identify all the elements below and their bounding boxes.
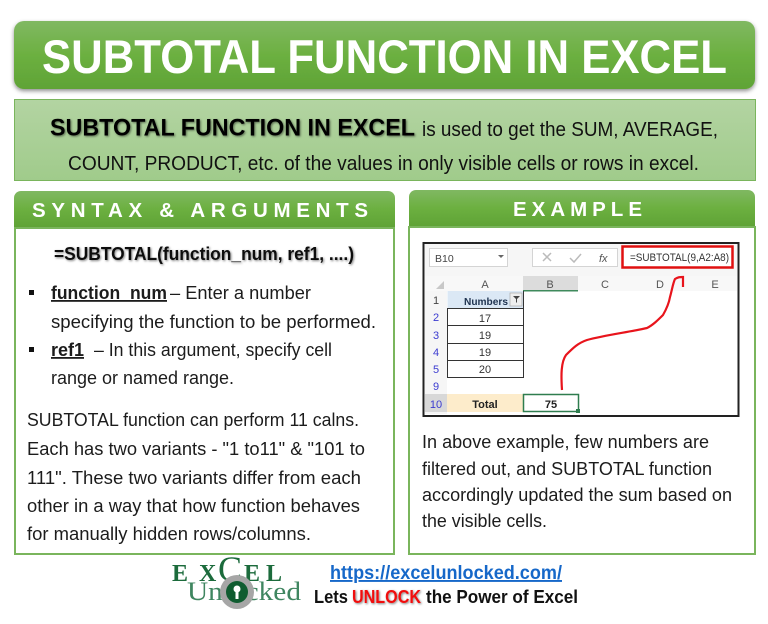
formula callout xyxy=(622,246,732,268)
example explanation: the visible cells. xyxy=(422,511,547,531)
heading: syntax and arguments: SYNTAX & ARGUMENTS xyxy=(32,199,368,222)
excel screenshot xyxy=(424,243,738,416)
panel: example xyxy=(409,190,755,554)
argument: function_num: – Enter a number xyxy=(170,283,311,303)
argument: ref1: ref1 xyxy=(51,340,84,360)
explanatory paragraph: Each has two variants - "1 to11" & "101 to xyxy=(27,439,365,459)
example explanation: In above example, few numbers are xyxy=(422,432,709,452)
column headers: E xyxy=(711,279,719,291)
argument: ref1: – In this argument, specify cell xyxy=(94,340,332,360)
panel: syntax and arguments xyxy=(14,191,395,554)
title: SUBTOTAL FUNCTION IN EXCEL xyxy=(42,30,727,83)
heading: example: EXAMPLE xyxy=(513,198,642,221)
tagline: UNLOCK xyxy=(352,587,421,607)
explanatory paragraph xyxy=(27,410,365,544)
logo: excel unlocked: Unlocked xyxy=(187,577,301,606)
panel: definition xyxy=(14,100,756,180)
row headers: 4 xyxy=(433,347,439,359)
tagline xyxy=(314,587,578,607)
example explanation: filtered out, and SUBTOTAL function xyxy=(422,459,712,479)
total row xyxy=(447,394,580,413)
row headers: 1 xyxy=(433,295,439,307)
total row: 75 xyxy=(545,399,557,411)
row headers: 2 xyxy=(433,312,439,324)
definition text xyxy=(68,119,718,175)
column headers: B xyxy=(546,279,554,291)
tagline: Lets xyxy=(314,587,348,607)
data table: 20 xyxy=(479,364,491,376)
row headers: 3 xyxy=(433,330,439,342)
website link: https://excelunlocked.com/ xyxy=(330,563,563,584)
data table xyxy=(448,291,524,378)
argument: function_num: function_num xyxy=(51,283,167,303)
definition text: is used to get the SUM, AVERAGE, xyxy=(422,119,718,141)
data table: 19 xyxy=(479,347,491,359)
formula syntax: =SUBTOTAL(function_num, ref1, ....) xyxy=(54,244,354,264)
example explanation xyxy=(422,432,732,531)
logo: excel unlocked xyxy=(172,549,301,609)
column headers xyxy=(425,276,737,292)
definition text: COUNT, PRODUCT, etc. of the values in only visible cells or rows in excel. xyxy=(68,153,699,175)
data table: 19 xyxy=(479,330,491,342)
example explanation: accordingly updated the sum based on xyxy=(422,485,732,505)
row headers xyxy=(425,291,447,414)
argument: function_num xyxy=(51,283,376,332)
formula buttons xyxy=(532,248,618,266)
column headers: A xyxy=(481,279,489,291)
formula buttons: fx xyxy=(599,253,608,265)
argument: ref1 xyxy=(51,340,332,388)
column headers: D xyxy=(656,279,664,291)
total row: Total xyxy=(472,399,498,411)
explanatory paragraph: other in a way that how function behaves xyxy=(27,496,360,516)
arrow: result to formula xyxy=(561,277,683,390)
definition heading: SUBTOTAL FUNCTION IN EXCEL xyxy=(50,114,415,142)
row headers: 10 xyxy=(430,399,442,411)
heading: example xyxy=(409,190,755,226)
row headers: 9 xyxy=(433,381,439,393)
explanatory paragraph: SUBTOTAL function can perform 11 calns. xyxy=(27,410,359,430)
explanatory paragraph: 111". These two variants differ from each xyxy=(27,468,361,488)
icon: lock xyxy=(220,575,254,609)
row headers: 5 xyxy=(433,364,439,376)
explanatory paragraph: for manually hidden rows/columns. xyxy=(27,524,311,544)
icon: bullet xyxy=(29,290,34,295)
name box: B10 xyxy=(435,253,454,265)
logo: excel unlocked: EXCEL xyxy=(172,549,282,589)
icon: bullet xyxy=(29,347,34,352)
data table: 17 xyxy=(479,313,491,325)
column headers: C xyxy=(601,279,609,291)
data table: Numbers xyxy=(464,296,508,308)
tagline: the Power of Excel xyxy=(426,587,578,607)
argument: function_num: specifying the function to be performed. xyxy=(51,312,376,332)
heading: syntax and arguments xyxy=(14,191,395,227)
argument: ref1: range or named range. xyxy=(51,368,234,388)
name box xyxy=(430,248,508,266)
formula callout: =SUBTOTAL(9,A2:A8) xyxy=(630,252,729,264)
